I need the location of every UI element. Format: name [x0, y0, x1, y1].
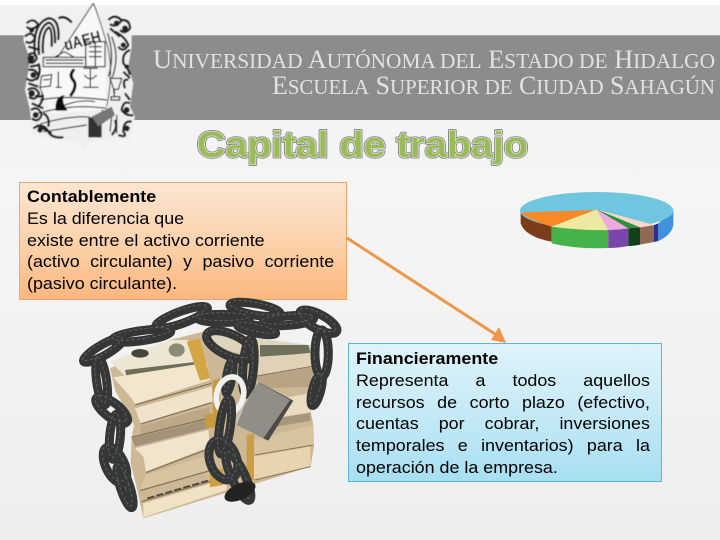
panel: Financieramente definition: Financieramente [356, 350, 498, 368]
panel: Contablemente definition: (pasivo circulante). [27, 275, 177, 293]
panel: Contablemente definition: (activo circulante) y pasivo corriente [27, 253, 334, 271]
panel: Financieramente definition: Representa a todos aquellos [356, 372, 650, 390]
panel: Contablemente definition: existe entre el activo corriente [27, 232, 265, 250]
panel: Financieramente definition: temporales e inventarios) para la [356, 437, 650, 455]
panel: Contablemente definition [19, 182, 347, 300]
chain [80, 298, 340, 509]
central field [40, 3, 107, 113]
right ornament [108, 17, 133, 136]
panel: Financieramente definition: cuentas por cobrar, inversiones [356, 415, 650, 433]
panel: Contablemente definition: Contablemente [27, 188, 156, 206]
header text: university name: ESCUELA SUPERIOR DE CIUDAD SAHAGÚN [272, 71, 715, 100]
header text: university name: UNIVERSIDAD AUTÓNOMA DEL ESTADO DE HIDALGO [153, 45, 715, 74]
title: Capital de trabajo [197, 124, 528, 165]
header text: university name [153, 45, 715, 100]
panel: Financieramente definition [348, 343, 662, 482]
icon: university crest [22, 2, 136, 140]
panel: Financieramente definition: operación de la empresa. [356, 459, 558, 477]
bill stack [110, 332, 315, 518]
top white strip [0, 0, 720, 5]
panel: Financieramente definition: recursos de corto plazo (efectivo, [356, 394, 650, 412]
title: Capital de trabajo [197, 124, 528, 165]
icon: 3D pie chart [520, 192, 674, 248]
illustration: money stack bound by chain and padlock [79, 298, 342, 518]
left faces [113, 363, 210, 404]
lower chain [203, 397, 258, 506]
padlock [212, 374, 293, 441]
paper bands [187, 338, 210, 381]
top surface of bills [110, 340, 200, 377]
right faces [257, 353, 314, 376]
crest lettering: uAEH [62, 27, 103, 55]
arrow: from Contablemente to Financieramente [346, 236, 506, 343]
panel: Contablemente definition: Es la diferencia que [27, 210, 184, 228]
building [38, 42, 122, 133]
left ornament [25, 17, 72, 137]
header band [0, 35, 720, 120]
